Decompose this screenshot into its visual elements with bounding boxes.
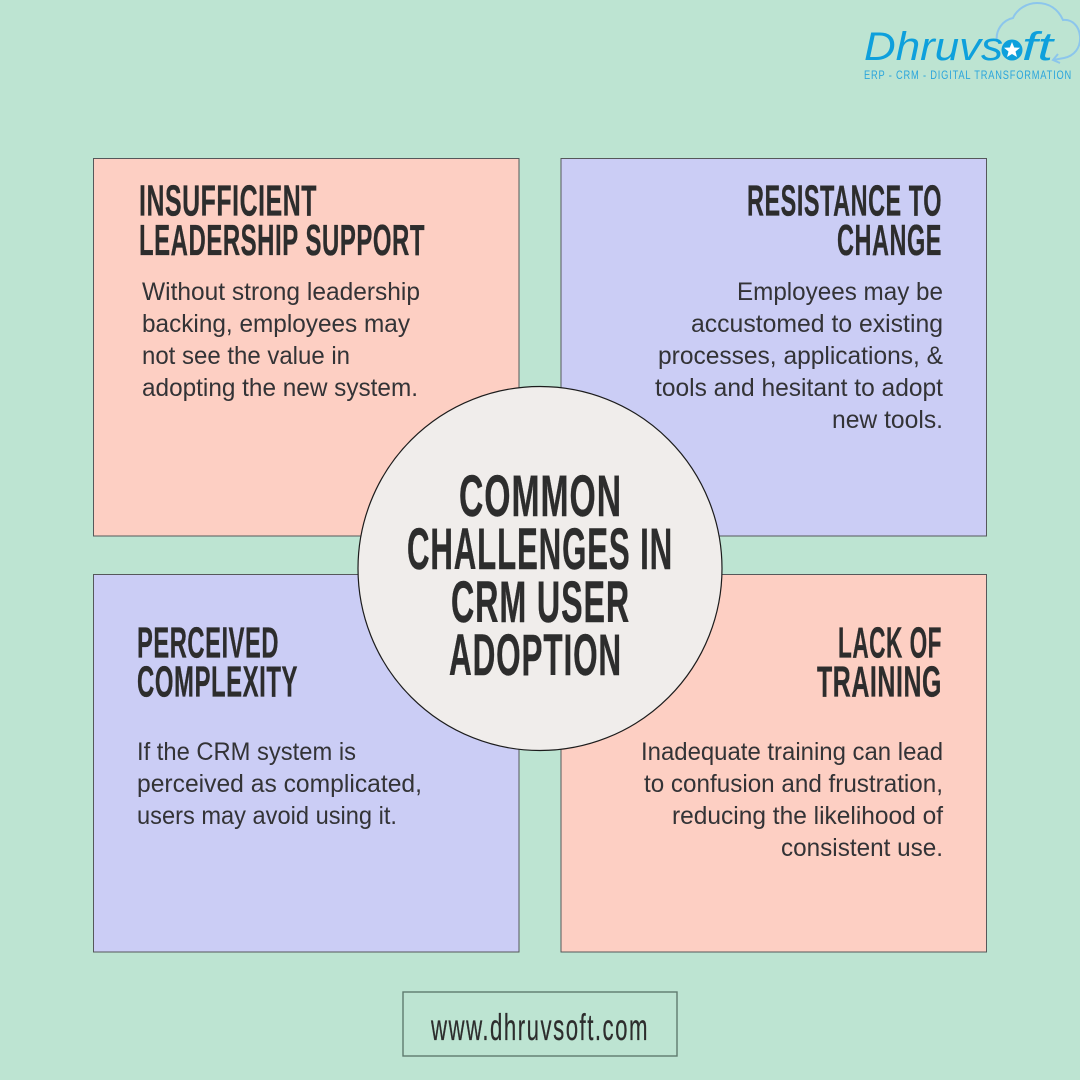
text block: adopting the new system. — [142, 374, 418, 402]
heading: PERCEIVED — [137, 620, 279, 668]
text block: Employees may be — [737, 278, 943, 306]
title: ADOPTION — [449, 623, 622, 688]
text block: perceived as complicated, — [137, 770, 422, 798]
icon: star in circle — [1002, 40, 1022, 60]
heading — [139, 178, 425, 265]
title: CHALLENGES IN — [407, 517, 673, 582]
text block: backing, employees may — [142, 310, 410, 338]
text block — [655, 278, 943, 434]
text block — [142, 278, 420, 402]
heading: TRAINING — [817, 658, 942, 706]
text block: to confusion and frustration, — [644, 770, 943, 798]
panel: resistance to change — [561, 158, 986, 536]
heading: COMPLEXITY — [137, 658, 298, 706]
center circle: title — [358, 386, 722, 750]
heading: CHANGE — [837, 217, 942, 265]
panel: perceived complexity — [94, 574, 519, 952]
text block: processes, applications, & — [658, 342, 943, 370]
text block: accustomed to existing — [691, 310, 943, 338]
text block: users may avoid using it. — [137, 802, 397, 830]
heading: LEADERSHIP SUPPORT — [139, 217, 425, 265]
heading — [817, 620, 942, 706]
text block: reducing the likelihood of — [672, 802, 943, 830]
text block: consistent use. — [781, 834, 943, 862]
text block — [641, 738, 943, 862]
heading: INSUFFICIENT — [139, 178, 317, 226]
logo wordmark: Dhruvs — [864, 25, 1003, 69]
icon: cloud outline — [997, 3, 1080, 63]
title: CRM USER — [451, 570, 630, 635]
title — [407, 464, 673, 688]
logo wordmark: ft — [1022, 25, 1056, 69]
panel: insufficient leadership support — [94, 158, 519, 536]
text block: not see the value in — [142, 342, 350, 370]
title: COMMON — [459, 464, 622, 529]
logo wordmark — [864, 25, 1056, 69]
heading: LACK OF — [838, 620, 942, 668]
text block: new tools. — [832, 406, 943, 434]
logo: Dhruvsoft — [864, 3, 1080, 82]
text block: Without strong leadership — [142, 278, 420, 306]
footer: website: www.dhruvsoft.com — [430, 1007, 649, 1048]
panel: lack of training — [561, 574, 986, 952]
text block: tools and hesitant to adopt — [655, 374, 943, 402]
footer: website — [403, 992, 677, 1056]
heading — [747, 178, 942, 265]
text block: Inadequate training can lead — [641, 738, 943, 766]
text block: If the CRM system is — [137, 738, 356, 766]
heading — [137, 620, 298, 706]
text block — [137, 738, 422, 830]
